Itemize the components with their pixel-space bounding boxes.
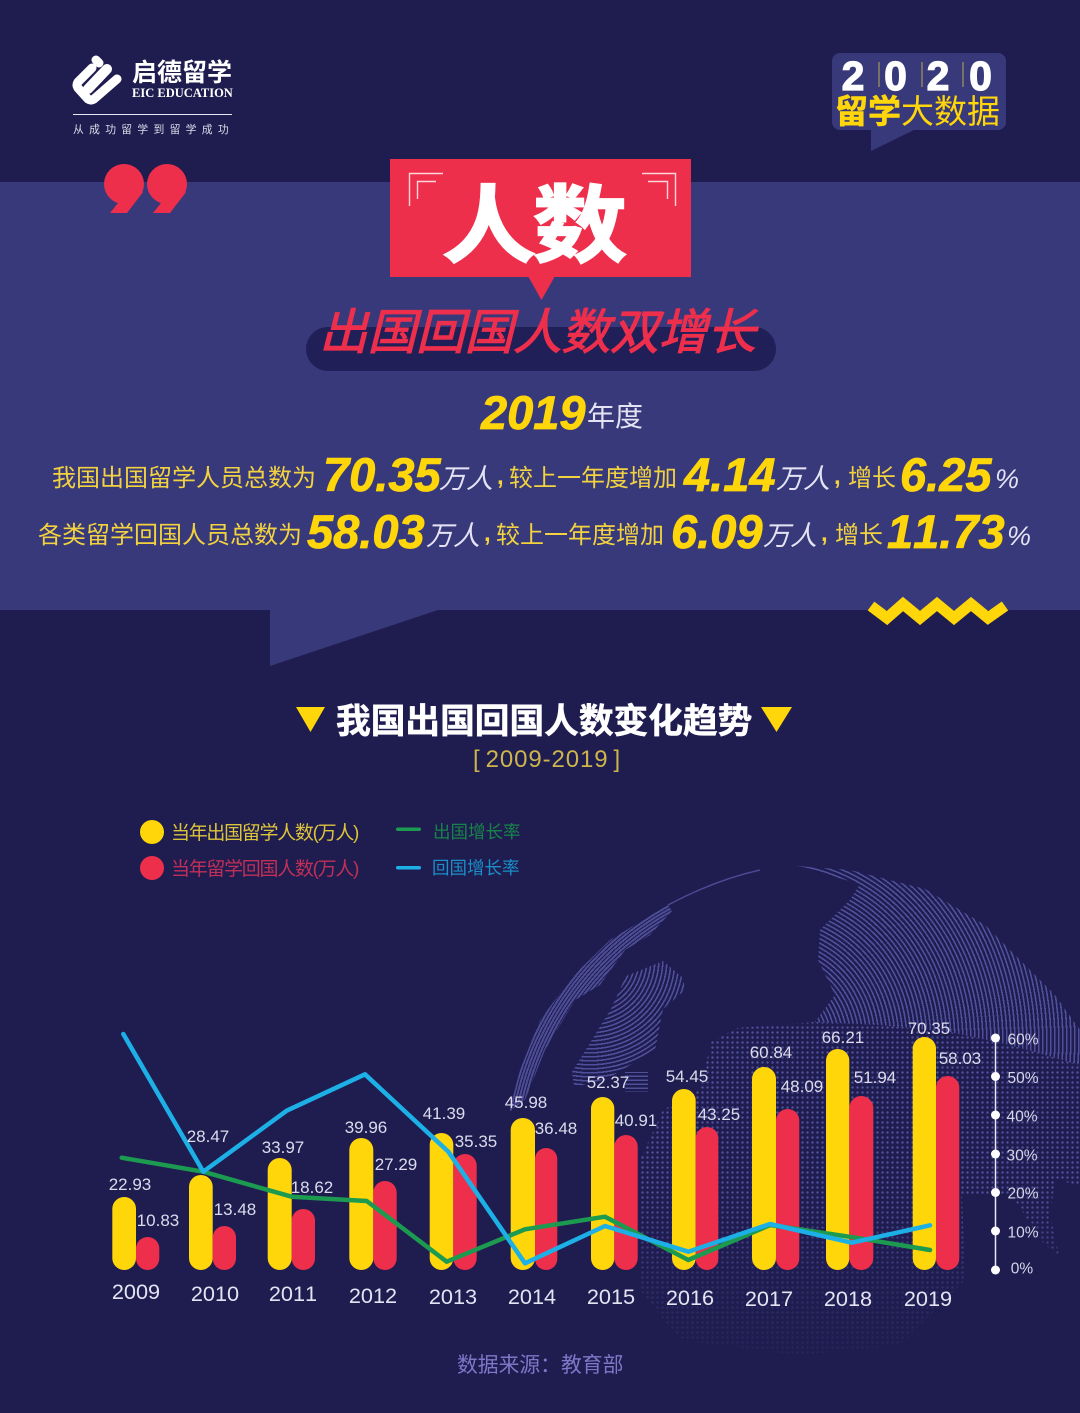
departures unit: 万人 [439,464,493,494]
yellow bars: departures [112,1037,936,1270]
value labels [109,1019,981,1230]
percent axis: 50% [1007,1070,1039,1087]
value labels: 18.62 [291,1178,333,1197]
year labels: 2012 [349,1283,397,1308]
legend departure rate: 出国增长率 [433,822,520,842]
returnees total: 58.03 [307,505,425,558]
badge digits: 0 [884,53,907,99]
stat line: returnees [38,505,1031,558]
value labels: 39.96 [345,1118,387,1137]
globe: west rim [510,906,672,1112]
year labels: 2011 [269,1281,317,1306]
year labels: 2017 [745,1286,793,1311]
value labels: 48.09 [781,1077,823,1096]
red bars: returnees [136,1076,959,1270]
year line [480,386,643,439]
badge digits: 2 [842,53,864,99]
percent axis: 60% [1007,1032,1039,1048]
year labels: 2018 [824,1286,872,1311]
value labels: 35.35 [455,1132,497,1151]
returnees percent: % [1007,521,1031,551]
badge digits [842,53,992,99]
departures growth label: 增长 [848,465,896,492]
returnees label: 各类留学回国人员总数为 [38,522,302,549]
globe backdrop [510,866,1080,1354]
departures growth: 6.25 [900,448,991,501]
legend departures: 当年出国留学人数(万人) [171,823,358,844]
logo rule [73,114,232,115]
departures total: 70.35 [323,448,441,501]
percent axis: 40% [1006,1108,1038,1126]
badge: 2020 [832,53,1006,151]
year labels: 2010 [191,1281,239,1306]
value labels: 27.29 [375,1155,417,1174]
subtitle pill [306,327,776,371]
value labels: 52.37 [587,1073,629,1092]
year labels: 2016 [666,1285,714,1310]
legend returnees: 当年留学回国人数(万人) [171,859,358,880]
value labels: 58.03 [939,1049,981,1068]
logo slogan: 从成功留学到留学成功 [73,124,234,136]
value labels: 22.93 [109,1175,151,1194]
year labels: 2019 [904,1286,952,1311]
stat line: departures [52,448,1019,501]
returnees unit: 万人 [426,521,480,551]
logo [72,56,234,136]
value labels: 13.48 [214,1200,256,1219]
badge bubble [832,53,1006,151]
value labels: 33.97 [262,1138,304,1157]
value labels: 70.35 [908,1019,950,1038]
departures comma: , [497,463,504,490]
year number: 2019 [481,386,586,439]
heading years: [2009-2019] [473,746,620,773]
returnees increase label: 较上一年度增加 [496,522,664,549]
value labels: 28.47 [187,1127,229,1146]
percent axis: 20% [1007,1186,1039,1202]
icon: EIC logo mark [72,56,122,105]
percent axis: 30% [1006,1148,1038,1164]
badge digits: 0 [969,53,992,99]
year labels [112,1279,952,1311]
value labels: 40.91 [615,1111,657,1130]
year labels: 2009 [112,1279,160,1304]
value labels: 54.45 [666,1067,708,1086]
title box shape [390,159,691,300]
departures percent: % [995,464,1019,494]
globe: dotted continent [641,1022,1079,1354]
year labels: 2015 [587,1284,635,1309]
value labels: 66.21 [822,1028,864,1047]
title text: 人数 [442,179,624,274]
line: return growth rate [123,1034,930,1263]
departures increase unit: 万人 [776,464,830,494]
line: departure growth rate [122,1158,930,1262]
globe: north continent stripes [798,866,1080,1064]
returnees growth label: 增长 [835,522,883,549]
value labels: 36.48 [535,1119,577,1138]
logo english: EIC EDUCATION [132,86,233,100]
returnees increase: 6.09 [671,505,762,558]
legend [140,820,520,880]
zigzag ornament [868,596,1008,626]
year suffix: 年度 [587,401,643,432]
section heading [296,702,792,773]
departures comma 2: , [834,463,841,490]
value labels: 43.25 [698,1105,740,1124]
globe: south islands [625,1072,648,1092]
globe: west continent stripes [572,961,684,1086]
returnees comma: , [484,520,491,547]
value labels: 51.94 [854,1068,896,1087]
legend swatches [140,820,421,880]
returnees growth: 11.73 [887,505,1005,558]
percent axis [991,1032,1039,1278]
value labels: 45.98 [505,1093,547,1112]
source note: 数据来源：教育部 [457,1354,623,1377]
percent axis: 10% [1007,1224,1039,1242]
year labels: 2013 [429,1284,477,1309]
legend return rate: 回国增长率 [432,858,520,878]
logo name: 启德留学 [132,59,232,87]
title box: 人数 [390,159,691,300]
returnees comma 2: , [821,520,828,547]
value labels: 60.84 [750,1043,792,1062]
value labels: 10.83 [137,1211,179,1230]
icon: quotation marks [104,164,187,213]
returnees increase unit: 万人 [763,521,817,551]
badge digits: 2 [927,53,949,99]
departures label: 我国出国留学人员总数为 [52,465,316,492]
percent axis: 0% [1011,1260,1033,1278]
badge label: 留学大数据 [835,93,1000,130]
heading triangles [296,707,792,732]
departures increase: 4.14 [684,448,775,501]
departures increase label: 较上一年度增加 [509,465,677,492]
value labels: 41.39 [423,1104,465,1123]
year labels: 2014 [508,1284,556,1309]
subtitle: 出国回国人数双增长: 出国回国人数双增长 [316,306,766,360]
heading text: 我国出国回国人数变化趋势 [336,703,752,741]
